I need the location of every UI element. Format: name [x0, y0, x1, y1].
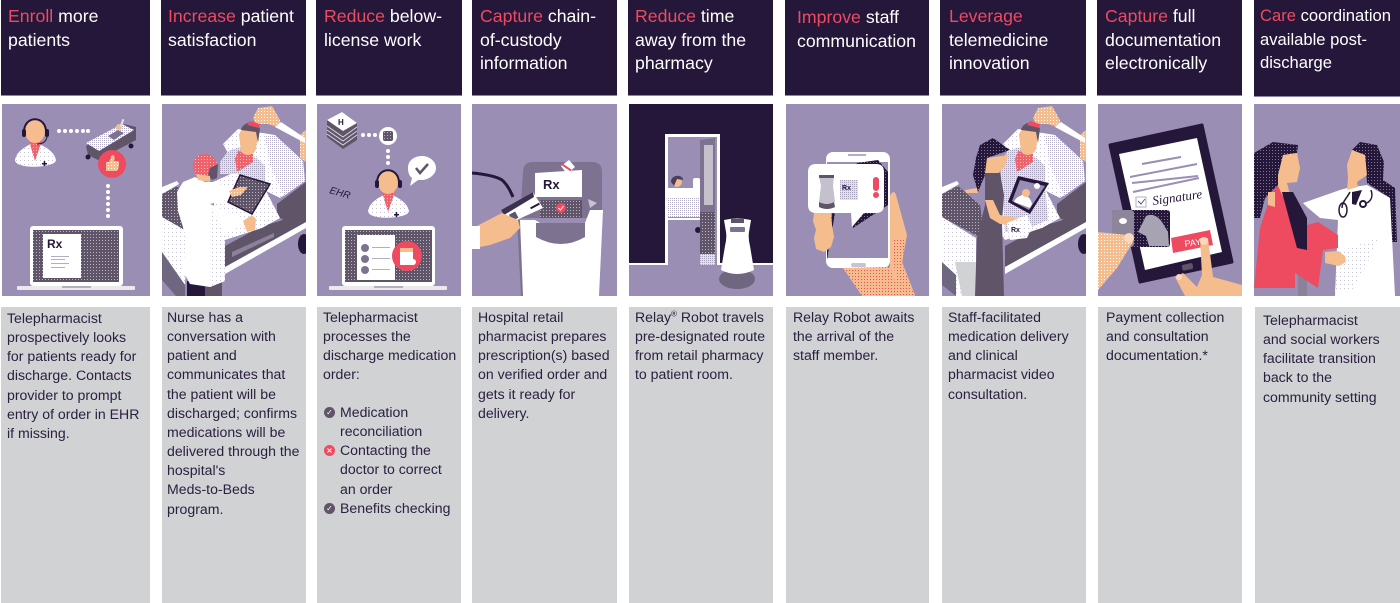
text: retail pharmacist step: Hospital retail [478, 309, 563, 325]
text: robot travels step: pre-designated route [635, 328, 765, 344]
text: discharge order step with checklist [317, 307, 461, 603]
header: Care coordination available post-discharge: Care coordination [1260, 6, 1391, 25]
text: enroll step: prospectively looks [7, 329, 126, 345]
header: Increase patient satisfaction: Increase patient [168, 6, 294, 26]
dotted connector vertical [106, 184, 110, 218]
text: consultation step [942, 307, 1086, 603]
header: Capture chain-of-custody information: Capture chain- [480, 6, 596, 26]
icon: hospital building: H [338, 118, 344, 127]
text: retail pharmacist step: gets it ready for [478, 386, 575, 402]
doctor in white coat [1303, 150, 1395, 296]
text: nurse step: medications will be [167, 424, 285, 440]
patient [1000, 121, 1048, 232]
checklist: Benefits checking [340, 500, 450, 516]
header: Increase patient satisfaction: satisfaction [168, 30, 256, 50]
text: enroll step [1, 307, 150, 603]
staff member in dark dress [965, 138, 1024, 296]
text: nurse step: Meds-to-Beds [167, 481, 255, 497]
text: care coordination step: and social workers [1263, 331, 1380, 347]
checklist: Contacting the [340, 442, 431, 458]
header: Enroll more patients: patients [8, 30, 70, 50]
text: care coordination step: back to the [1263, 369, 1332, 385]
text: robot travels step: Relay® Robot travels [635, 309, 764, 325]
text: payment step: and consultation [1106, 328, 1209, 344]
checklist [324, 404, 450, 516]
header: Enroll more patients: Enroll more [8, 6, 98, 26]
text: discharge order step with checklist: order: [323, 366, 360, 382]
text: robot awaits step: staff member. [793, 347, 878, 363]
text: enroll step: for patients ready for [7, 348, 136, 364]
header: Increase patient satisfaction [161, 0, 306, 96]
text: consultation step: pharmacist video [948, 366, 1055, 382]
hospital bed [213, 106, 310, 274]
text: nurse step: communicates that [167, 366, 285, 382]
header: Capture chain-of-custody information: of-custody [480, 30, 562, 50]
checklist: ✓ [326, 504, 333, 513]
icon: laptop with prescription: Rx [47, 237, 63, 251]
tablet with video call [1008, 176, 1049, 214]
header: Capture chain-of-custody information [472, 0, 617, 96]
label: EHR: EHR [328, 185, 352, 202]
text: retail pharmacist step: delivery. [478, 405, 529, 421]
text: robot travels step [629, 307, 773, 603]
icon: check speech bubble [408, 156, 436, 186]
header: Reduce time away from the pharmacy: pharmacy [635, 53, 713, 73]
header: Capture full documentation electronically [1097, 0, 1242, 96]
header: Reduce below-license work [316, 0, 462, 96]
panel: processes discharge order [317, 104, 461, 296]
text: retail pharmacist step [472, 307, 617, 603]
icon: telepharmacist with headset [15, 119, 56, 167]
text: enroll step: Telepharmacist [7, 310, 102, 326]
text: enroll step: if missing. [7, 425, 70, 441]
icon: credit card [1112, 210, 1170, 247]
icon: telepharmacist with headset [368, 170, 409, 218]
text: consultation step: and clinical [948, 347, 1018, 363]
icon: thumbs up badge [98, 150, 126, 178]
text: enroll step: entry of order in EHR [7, 406, 139, 422]
header: Reduce time away from the pharmacy [628, 0, 773, 96]
icon: prescription bag: Rx [543, 177, 560, 192]
icon: hand holding phone [813, 192, 915, 296]
header: Leverage telemedicine innovation: Leverage [949, 6, 1023, 26]
header: Leverage telemedicine innovation [940, 0, 1086, 96]
header: Enroll more patients [1, 0, 150, 96]
header: Improve staff communication: Improve staff [797, 7, 899, 27]
icon: hands [1098, 232, 1242, 296]
icon: hand swiping ID badge [472, 173, 543, 249]
hospital bed [942, 106, 1090, 296]
prescription bag: Rx [1011, 227, 1020, 234]
icon: smartphone [826, 152, 890, 268]
checklist: reconciliation [340, 423, 422, 439]
header: Capture chain-of-custody information: information [480, 53, 568, 73]
icon: relay robot [719, 218, 755, 289]
header: Improve staff communication [785, 0, 929, 96]
patient [220, 121, 265, 182]
checklist: Medication [340, 404, 408, 420]
header: Reduce time away from the pharmacy: Reduce time [635, 6, 734, 26]
text: consultation step: medication delivery [948, 328, 1069, 344]
icon: tablet with signature [1110, 125, 1232, 282]
header: Leverage telemedicine innovation: telemedicine [949, 30, 1048, 50]
icon: prescription bag [535, 160, 582, 197]
text: robot travels step: to patient room. [635, 366, 733, 382]
text: nurse step: the patient will be [167, 386, 276, 402]
header: Care coordination available post-discharge: available post- [1260, 30, 1367, 48]
text: nurse step: delivered through the [167, 443, 299, 459]
icon: laptop with prescription [17, 226, 135, 290]
text: robot awaits step: the arrival of the [793, 328, 894, 344]
panel: robot travels route [629, 104, 773, 296]
door [700, 138, 715, 265]
icon: hospital building [327, 112, 357, 149]
panel: robot awaits staff [786, 104, 929, 296]
header: Care coordination available post-discharge: discharge [1260, 53, 1332, 72]
text: nurse step: patient and [167, 347, 237, 363]
text: nurse step [162, 307, 306, 603]
icon: patient bed [86, 119, 136, 160]
illustrations strip [2, 104, 1400, 296]
panel: nurse and patient [162, 104, 310, 296]
patient in coral coat [1254, 142, 1346, 296]
pay button [1171, 230, 1213, 253]
icon: robot open compartment [517, 162, 603, 296]
checklist: doctor to correct [340, 461, 442, 477]
text: discharge order step with checklist: processes the [323, 328, 411, 344]
checklist: an order [340, 481, 392, 497]
icon: laptop with checklist [329, 226, 447, 290]
text: robot travels step: from retail pharmacy [635, 347, 763, 363]
text: care coordination step [1255, 307, 1400, 603]
header: Care coordination available post-discharge [1254, 0, 1400, 97]
dotted connector vertical [386, 149, 390, 165]
prescription bag [1007, 215, 1032, 240]
doctor with white coat [177, 154, 243, 296]
text: consultation step: Staff-facilitated [948, 309, 1041, 325]
text: robot awaits step [786, 307, 929, 603]
speech bubble alert: Rx [842, 185, 851, 192]
text: enroll step: discharge. Contacts [7, 367, 132, 383]
header: Reduce below-license work: license work [324, 30, 421, 50]
panel: clinical pharmacist video consult [942, 104, 1090, 296]
panel: payment and documentation [1098, 104, 1242, 296]
icon: tablet with signature: Signature [1151, 186, 1203, 208]
patient in bed [668, 176, 701, 233]
header: Capture full documentation electronically: documentation [1105, 30, 1221, 50]
header: Leverage telemedicine innovation: innovation [949, 53, 1030, 73]
text: payment step: documentation.* [1106, 347, 1208, 363]
text: enroll step: provider to prompt [7, 387, 121, 403]
text: discharge order step with checklist: Telepharmacist [323, 309, 418, 325]
text: care coordination step: community setting [1263, 389, 1377, 405]
header: Improve staff communication: communication [797, 30, 916, 50]
dotted connector horizontal [361, 133, 377, 137]
doctor hair [1352, 142, 1397, 242]
text: nurse step: hospital's [167, 462, 225, 478]
text: nurse step: Nurse has a [167, 309, 243, 325]
checklist: × [326, 446, 333, 455]
text: care coordination step: facilitate transition [1263, 350, 1376, 366]
text: payment step: Payment collection [1106, 309, 1224, 325]
text: nurse step: program. [167, 501, 223, 517]
bed mattress foreground [162, 181, 188, 296]
text: nurse step: conversation with [167, 328, 276, 344]
text: payment step [1098, 307, 1242, 603]
text: retail pharmacist step: on verified order and [478, 366, 607, 382]
dotted connector horizontal [57, 129, 90, 133]
header: Reduce time away from the pharmacy: away from the [635, 30, 746, 50]
text: consultation step: consultation. [948, 386, 1027, 402]
text: care coordination step: Telepharmacist [1263, 312, 1358, 328]
text: robot awaits step: Relay Robot awaits [793, 309, 914, 325]
doorway [665, 134, 720, 265]
text: nurse step: discharged; confirms [167, 405, 297, 421]
speech bubble alert [808, 164, 884, 227]
panel: retail pharmacist loads robot [472, 104, 617, 296]
panel: care coordination [1254, 104, 1400, 296]
header: Reduce below-license work: Reduce below- [324, 6, 442, 26]
checklist: ✓ [326, 408, 333, 417]
header: Capture full documentation electronically: electronically [1105, 53, 1207, 73]
icon: prescription record circle [379, 127, 397, 145]
text: retail pharmacist step: prescription(s) based [478, 347, 610, 363]
header: Capture full documentation electronically: Capture full [1105, 6, 1195, 26]
tablet and hands [228, 175, 270, 232]
text: discharge order step with checklist: discharge medication [323, 347, 456, 363]
text: retail pharmacist step: pharmacist prepares [478, 328, 606, 344]
pay button: PAY [1184, 237, 1202, 249]
panel: telepharmacist finds patient [2, 104, 150, 296]
